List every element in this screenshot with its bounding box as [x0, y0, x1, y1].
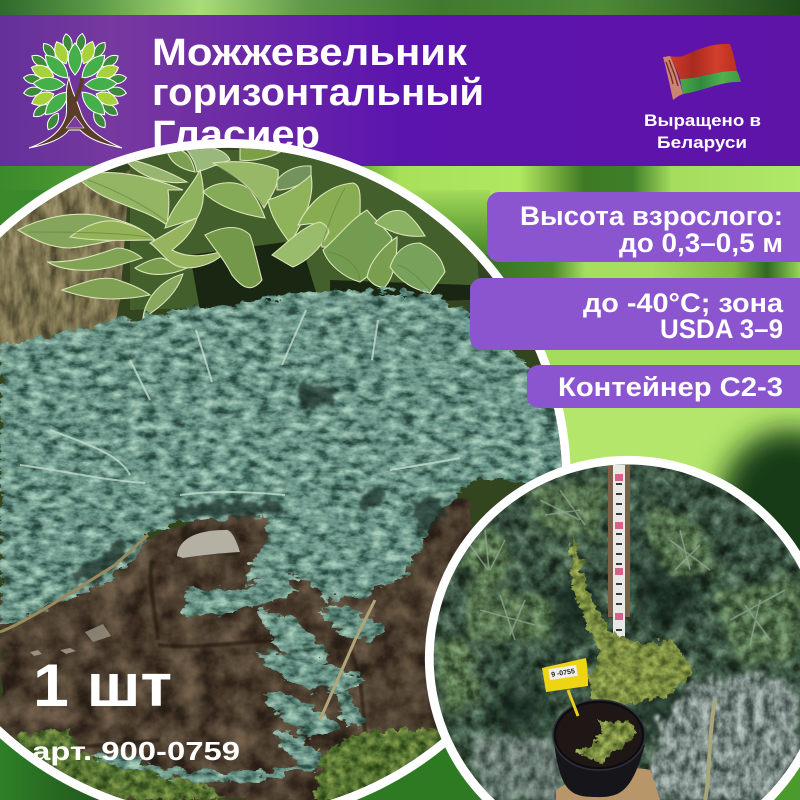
bottom conifer ground: [0, 730, 450, 800]
long blue stem across bottom: [95, 755, 310, 777]
yellow plant label: 9 -0755: [551, 668, 575, 679]
hanging juniper fronds over rock: [185, 575, 385, 770]
panel: height: Высота взрослого:: [520, 201, 783, 231]
potted juniper foliage: [570, 535, 695, 708]
blue-grey spruce on lower right: [650, 672, 800, 800]
logo: tree: [23, 33, 127, 148]
dry ornamental grass: [0, 170, 130, 355]
text: grown in Belarus: Беларуси: [657, 133, 747, 152]
rock cracks: [0, 560, 365, 747]
juniper light branches: [20, 310, 460, 495]
title text: Можжевельник: [152, 32, 468, 74]
panel: height: до 0,3–0,5 м: [619, 228, 783, 258]
quantity text: 1 шт: [33, 652, 172, 719]
juniper shadow pockets: [70, 385, 448, 590]
spruce branch stem: [705, 700, 715, 800]
icon: Belarus flag: [663, 44, 741, 100]
title text: Гласиер: [152, 114, 320, 156]
panel: frost hardiness: [470, 278, 800, 350]
light pine tufts: [437, 528, 510, 715]
dark gaps: [496, 550, 695, 736]
mid spruce fronds: [467, 480, 800, 665]
juniper stems on left: [0, 535, 148, 632]
panel: container: [527, 365, 800, 408]
panel: frost hardiness: до -40°С; зона: [583, 288, 784, 318]
hosta backdrop: [130, 150, 480, 310]
text: grown in Belarus: Выращено в: [644, 111, 761, 130]
bottom-left ground fronds: [470, 735, 570, 800]
spruce frond needles: [470, 490, 785, 645]
title text: горизонтальный: [152, 72, 484, 114]
pale lichen on rock: [30, 530, 240, 656]
title banner: [0, 15, 800, 166]
hosta leaves: [18, 146, 445, 318]
panel: height: [487, 192, 800, 262]
article number text: арт. 900-0759: [32, 736, 240, 766]
sandy ground: [556, 768, 660, 800]
yellow plant label: [542, 658, 588, 716]
juniper mass: [0, 290, 580, 630]
rock base: [0, 500, 480, 800]
frond stem: [320, 600, 375, 720]
photo: potted plant at height ruler in white ring: [425, 456, 800, 800]
photo: juniper over rock in white ring: [0, 139, 580, 800]
measuring pole: [608, 465, 630, 647]
title text: [152, 32, 484, 156]
pot: [553, 700, 645, 797]
text: grown in Belarus: [644, 111, 761, 152]
panel: container: Контейнер С2-3: [558, 372, 783, 402]
panel: frost hardiness: USDA 3–9: [660, 314, 783, 344]
hosta leaf veins: [28, 166, 430, 290]
